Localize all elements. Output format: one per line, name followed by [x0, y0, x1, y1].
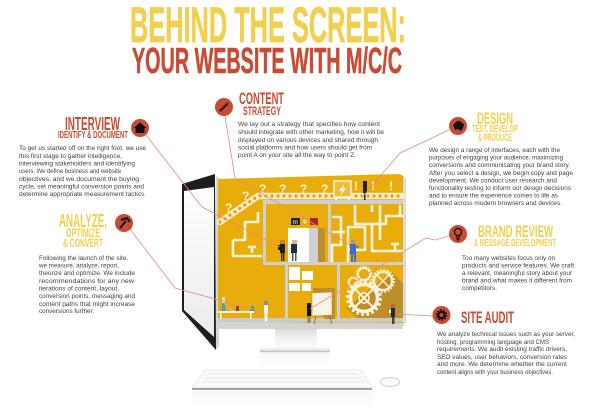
text: interview: cycle, set meaningful conversion points and [19, 183, 144, 190]
lightning box [334, 181, 351, 200]
connector lines [130, 116, 449, 316]
heading: interview: INTERVIEW [65, 114, 120, 134]
question marks: ? [300, 182, 307, 196]
monitor side frame [182, 174, 219, 350]
text: content strategy: displayed on various devices and shared through [238, 137, 378, 144]
text: design: We design a range of interfaces, each with the [429, 147, 560, 154]
mouse [380, 378, 400, 386]
keyboard [192, 370, 372, 408]
question marks: ? [321, 182, 328, 196]
pipes [233, 205, 403, 262]
question marks: ! [371, 179, 375, 193]
icon: gear [432, 306, 450, 324]
heading: brand review [474, 222, 556, 249]
conveyor belt [220, 196, 402, 222]
monitor stand and base [260, 329, 330, 366]
text: design: planned across modern browsers and devices. [429, 200, 562, 207]
text: design: After you select a design, we begin copy and page [429, 170, 573, 177]
heading: analyze [59, 211, 107, 250]
text: content strategy: point A on your site all the way to point Z. [238, 152, 356, 159]
question marks: ! [389, 179, 393, 193]
text: design: conversions and communicating your brand story. [429, 162, 570, 169]
lab bench [218, 297, 255, 319]
text: interview: this first stage to gather intelligence, [19, 153, 122, 160]
text: brand review: a relevant, meaningful story about your [462, 270, 573, 277]
text: analyze: conversions further. [39, 308, 94, 315]
heading: content strategy: STRATEGY [243, 106, 281, 118]
question marks: ! [354, 179, 358, 193]
icon: hammer [115, 214, 133, 232]
panel: design [429, 109, 573, 207]
gears [346, 266, 403, 318]
question marks [225, 179, 393, 215]
text: interview: users. We define business and website [19, 168, 121, 175]
heading: analyze: ANALYZE, [59, 211, 107, 231]
heading: analyze: & CONVERT [63, 236, 103, 250]
heading: design [472, 109, 518, 144]
text: site audit: We analyze technical issues such as your server, [437, 331, 575, 338]
text: analyze: we measure, analyze, report, [38, 262, 119, 270]
monitor screen cutaway [218, 174, 406, 329]
text: brand review: competitors. [462, 285, 497, 292]
heading: content strategy [239, 89, 284, 118]
text: interview: determine appropriate measurement tactics. [19, 191, 146, 198]
title [130, 0, 406, 81]
text: design: and to ensure the experience comes to life as [429, 192, 558, 200]
text: design [429, 147, 573, 207]
question marks: ? [259, 182, 266, 196]
question marks: ? [279, 182, 286, 196]
text: content strategy: social platforms and how users should get from [238, 144, 372, 152]
heading: analyze: OPTIMIZE [66, 226, 100, 240]
text: content strategy: We lay out a strategy that specifies how content [238, 121, 380, 128]
panel: interview [19, 114, 149, 198]
icon: home [131, 119, 149, 137]
text: design: purposes of engaging your audience, maximizing [429, 154, 563, 162]
text: site audit: content aligns with your business objectives. [437, 369, 553, 376]
text: brand review: brand and what makes it different from [462, 278, 572, 284]
window panes and easel room [289, 267, 335, 324]
question marks: ? [242, 189, 249, 203]
heading: design: TEST, DEVELOP [472, 124, 518, 135]
text: analyze: conversion points, messaging and [39, 293, 135, 300]
panel: content strategy [215, 89, 384, 159]
text: interview: interviewing stakeholders and identifying [19, 160, 135, 168]
panel: brand review [449, 222, 574, 292]
text: analyze: theorize and optimize. We include [39, 270, 135, 277]
heading: content strategy: CONTENT [239, 89, 284, 108]
text: analyze [38, 255, 135, 315]
heading: design: DESIGN [477, 109, 513, 128]
text: site audit: and more. We determine whether the current [437, 361, 567, 368]
heading: design: & PRODUCE [478, 132, 512, 144]
text: content strategy: should integrate with other marketing, how it will be [238, 129, 384, 136]
text: brand review: Too many websites focus only on [462, 255, 555, 262]
panel: analyze [38, 211, 135, 315]
text: site audit: hosting, programming language and CMS [437, 339, 549, 346]
text: site audit: SEO values, user behaviors, conversion rates [437, 354, 567, 361]
question marks: ? [225, 201, 232, 215]
heading: interview: IDENTIFY & DOCUMENT [58, 130, 128, 141]
text: analyze: iterations of content, layout, [39, 286, 119, 292]
pixel people [264, 181, 395, 324]
text: interview: To get us started off on the right foot, we use [19, 145, 146, 152]
icon: light bulb [449, 225, 467, 243]
text: interview: objectives, and we document the buying [19, 176, 139, 183]
text: site audit [437, 331, 575, 376]
heading: interview [58, 114, 128, 141]
text: site audit: requirements. We audit existing traffic drivers, [437, 346, 567, 353]
text: brand review [462, 255, 574, 292]
text: design: development. We conduct user research and [429, 178, 557, 184]
text: design: functionality testing to inform our design decisions [429, 185, 571, 192]
text: analyze: content paths that might increase [39, 301, 135, 308]
heading: site audit: SITE AUDIT [461, 308, 514, 327]
text: analyze: Following the launch of the site, [39, 255, 128, 262]
text: content strategy [238, 121, 384, 159]
panel: site audit [432, 306, 575, 376]
text: analyze: recommendations for any new [39, 278, 134, 285]
elevator with logos: m [292, 219, 298, 226]
icon: puzzle piece [449, 117, 467, 135]
text: brand review: products and service features. We craft [462, 262, 574, 270]
text: interview [19, 145, 146, 198]
elevator with logos [288, 218, 325, 262]
icon: wrench [215, 98, 233, 116]
